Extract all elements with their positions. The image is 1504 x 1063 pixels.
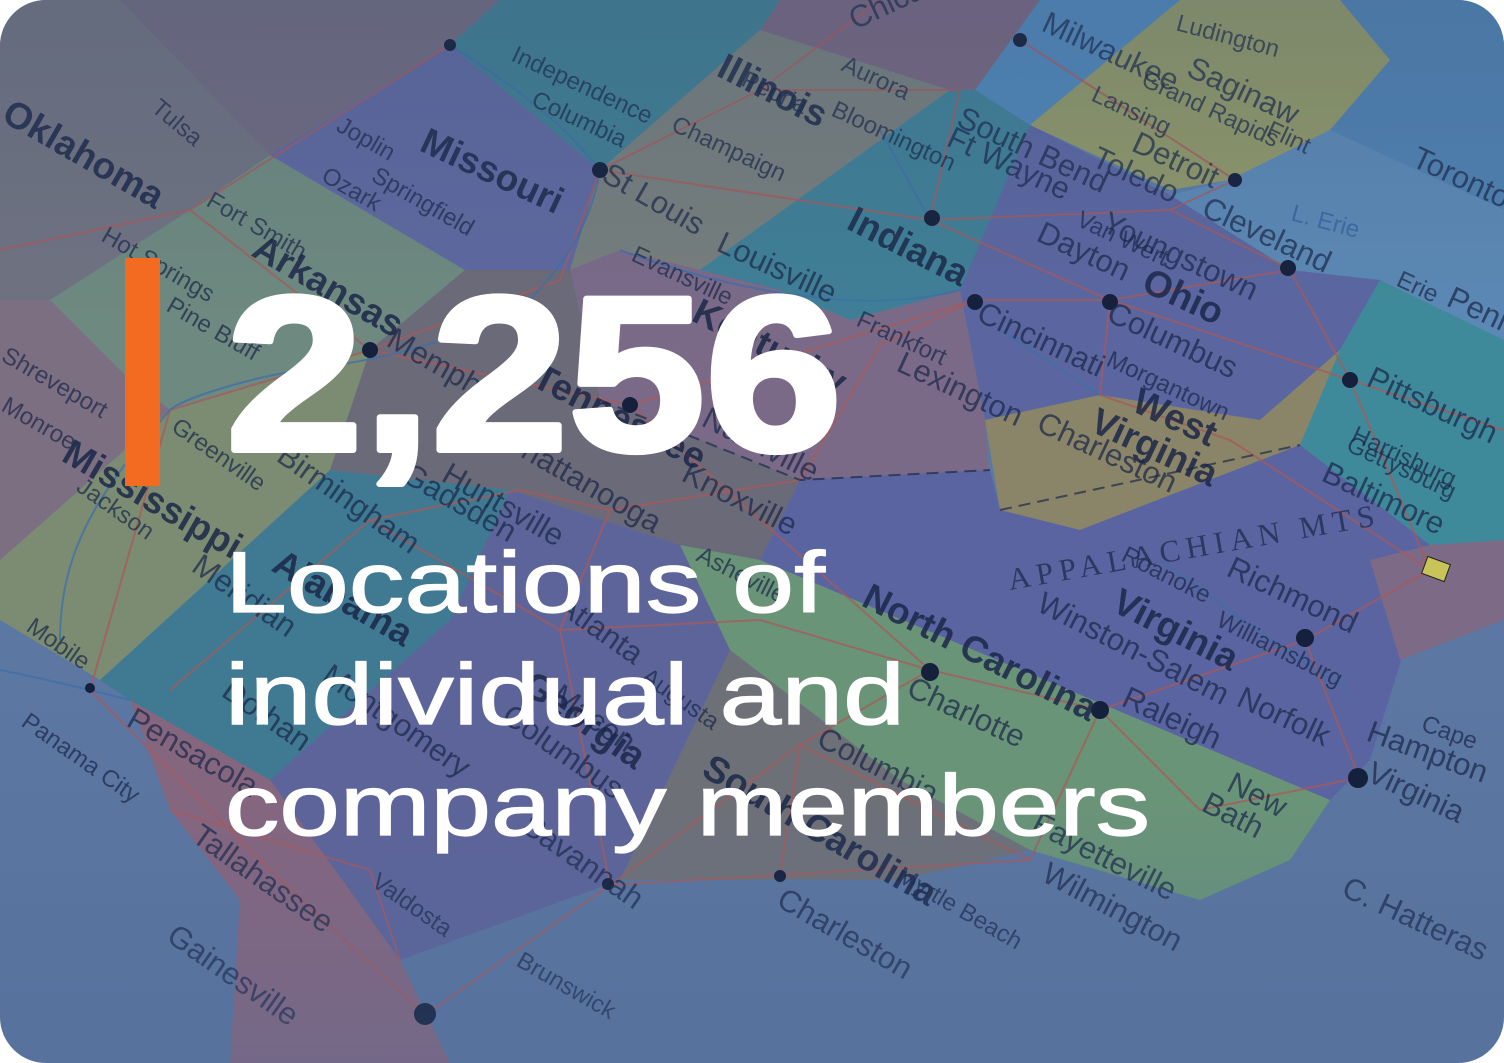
map: place labels: Tallahassee bbox=[186, 817, 340, 940]
map: place labels: Charleston bbox=[772, 881, 919, 986]
map: place labels: Virginia bbox=[1085, 400, 1225, 494]
map: place labels: Detroit bbox=[1127, 125, 1225, 195]
map: place labels: Ft Wayne bbox=[942, 120, 1076, 207]
map: place labels: Morgantown bbox=[1102, 346, 1234, 426]
map: place labels: Roanoke bbox=[1117, 541, 1215, 609]
map: place labels: Milwaukee bbox=[1037, 5, 1185, 98]
map: place labels: South Carolina bbox=[696, 746, 945, 914]
map: place labels: Indiana bbox=[841, 199, 976, 294]
map: place labels: Columbus bbox=[496, 697, 630, 806]
map: place labels: Williamsburg bbox=[1212, 606, 1347, 693]
map: place labels: Saginaw bbox=[1182, 50, 1305, 132]
map: place labels: Virginia bbox=[1106, 581, 1246, 679]
map: place labels: South Bend bbox=[952, 100, 1114, 200]
map: place labels: Brunswick bbox=[512, 947, 621, 1025]
map: place labels: Illinois bbox=[711, 46, 834, 135]
map: place labels: Toledo bbox=[1087, 140, 1185, 210]
map: place labels: Norfolk bbox=[1232, 680, 1336, 753]
map: place labels: Harrisburg bbox=[1347, 421, 1460, 493]
map: place labels: Independence bbox=[507, 41, 657, 130]
map: place labels: Montgomery bbox=[316, 657, 478, 785]
map: place labels: C. Hatteras bbox=[1337, 870, 1494, 968]
map: place labels: West bbox=[1127, 380, 1223, 454]
map: place labels: Jackson bbox=[72, 473, 159, 545]
map: place labels: Tulsa bbox=[146, 94, 208, 152]
map: place labels: Birmingham bbox=[271, 437, 427, 561]
map: place labels: Huntsville bbox=[436, 456, 570, 553]
map: place labels: Gadsden bbox=[396, 456, 523, 549]
map: place labels: Shreveport bbox=[0, 342, 112, 424]
map: place labels: Charleston bbox=[1032, 405, 1183, 500]
map: place labels: Atlanta bbox=[551, 587, 651, 672]
map: place labels: Virginia bbox=[1362, 755, 1471, 830]
map: place labels: Flint bbox=[1262, 116, 1315, 160]
map: place labels: North Carolina bbox=[856, 576, 1104, 729]
map: place labels: Columbia bbox=[527, 86, 631, 154]
map: place labels: Van Wert bbox=[1072, 206, 1173, 272]
description text: individual and bbox=[225, 647, 905, 743]
map: place labels: Fayetteville bbox=[1027, 805, 1182, 907]
map: place labels: St Louis bbox=[596, 156, 711, 242]
map: place labels: Louisville bbox=[712, 225, 842, 310]
map: place labels: Bath bbox=[1197, 785, 1270, 845]
map: place labels: Dothan bbox=[216, 672, 318, 758]
map: place labels: L. Erie bbox=[1288, 200, 1362, 244]
map: place labels: Augusta bbox=[637, 663, 725, 736]
map: place labels: Oklahoma bbox=[0, 91, 172, 217]
description text: Locations of bbox=[225, 535, 826, 631]
map: place labels: APPALACHIAN MTS bbox=[1005, 497, 1383, 597]
map: place labels: Wilmington bbox=[1037, 855, 1189, 958]
map: place labels: Georgia bbox=[515, 663, 654, 777]
map: place labels: Memphis bbox=[382, 321, 508, 414]
map: place labels: Asheville bbox=[692, 541, 790, 609]
map: place labels: Arkansas bbox=[246, 226, 411, 345]
description text: company members bbox=[225, 758, 1150, 854]
map: place labels: Lexington bbox=[892, 345, 1029, 433]
map: place labels: Grand Rapids bbox=[1137, 66, 1283, 153]
map: place labels: Chattanooga bbox=[496, 421, 668, 540]
map: place labels: Springfield bbox=[367, 162, 479, 242]
map: place labels: Cleveland bbox=[1197, 190, 1337, 280]
map: place labels: Gainesville bbox=[161, 917, 305, 1033]
map: place labels: Charlotte bbox=[902, 670, 1031, 755]
map: place labels: Valdosta bbox=[367, 868, 458, 943]
map: place labels: Erie bbox=[1392, 266, 1443, 308]
map: place labels: Columbus bbox=[1102, 295, 1243, 385]
map: place labels: Richmond bbox=[1222, 550, 1363, 640]
map: place labels: Frankfort bbox=[852, 306, 951, 371]
map: place labels: Ludington bbox=[1173, 10, 1282, 63]
map: place labels: Joplin bbox=[332, 112, 400, 167]
map: place labels: Cape bbox=[1418, 710, 1481, 755]
map: place labels: Missouri bbox=[415, 120, 570, 222]
map: place labels: Baltimore bbox=[1317, 455, 1451, 542]
map: place labels: Lansing bbox=[1087, 81, 1175, 141]
map: place labels: Mobile bbox=[22, 613, 95, 675]
map: place labels: Winston-Salem bbox=[1032, 585, 1235, 712]
map: place labels: Cincinnati bbox=[972, 295, 1110, 384]
map: place labels: Macon bbox=[546, 677, 642, 759]
map: place labels: Greenville bbox=[167, 413, 271, 497]
map: place labels: Ohio bbox=[1137, 260, 1230, 333]
map: place labels: Aurora bbox=[837, 51, 915, 106]
map: place labels: New bbox=[1222, 765, 1294, 825]
map: place labels: Tennessee bbox=[526, 356, 713, 478]
map: place labels: Panama City bbox=[17, 708, 145, 809]
map: place labels: Columbia bbox=[812, 720, 945, 811]
map: city dots bbox=[85, 33, 1368, 1025]
map: place labels: Gettysburg bbox=[1342, 431, 1460, 505]
description text bbox=[225, 535, 1150, 854]
map: place labels: Meridian bbox=[186, 547, 303, 644]
map: place labels: Pensacola bbox=[122, 701, 265, 804]
map: place labels: Myrtle Beach bbox=[892, 862, 1027, 955]
map: place labels: Youngstown bbox=[1097, 205, 1264, 307]
map: place labels: Kentucky bbox=[686, 291, 854, 403]
map: place labels: Raleigh bbox=[1117, 680, 1227, 756]
map: place labels: Hampton bbox=[1363, 714, 1493, 790]
map: place labels: Champaign bbox=[667, 111, 790, 187]
map: place labels: Bloomington bbox=[827, 96, 960, 177]
map: place labels: Fort Smith bbox=[202, 187, 311, 266]
accent bar bbox=[125, 258, 160, 486]
map: place labels: Knoxville bbox=[677, 455, 803, 543]
map: place labels: Evansville bbox=[627, 241, 737, 311]
map: place labels: Dayton bbox=[1032, 215, 1136, 288]
map: place labels: Pittsburgh bbox=[1362, 360, 1503, 450]
map: place labels: Nashville bbox=[697, 400, 825, 488]
map: place labels: Peoria bbox=[737, 66, 812, 120]
map: place labels: Alabama bbox=[266, 541, 420, 654]
map: place labels: Mississippi bbox=[56, 431, 249, 567]
map: place labels: Savannah bbox=[516, 807, 650, 916]
headline number: 2,256 bbox=[226, 251, 842, 497]
map: place labels: Hot Springs bbox=[97, 222, 219, 308]
map: place labels: Ozark bbox=[317, 162, 387, 218]
map: airport marker bbox=[1422, 556, 1450, 582]
map: place labels: Pine Bluff bbox=[162, 292, 264, 367]
